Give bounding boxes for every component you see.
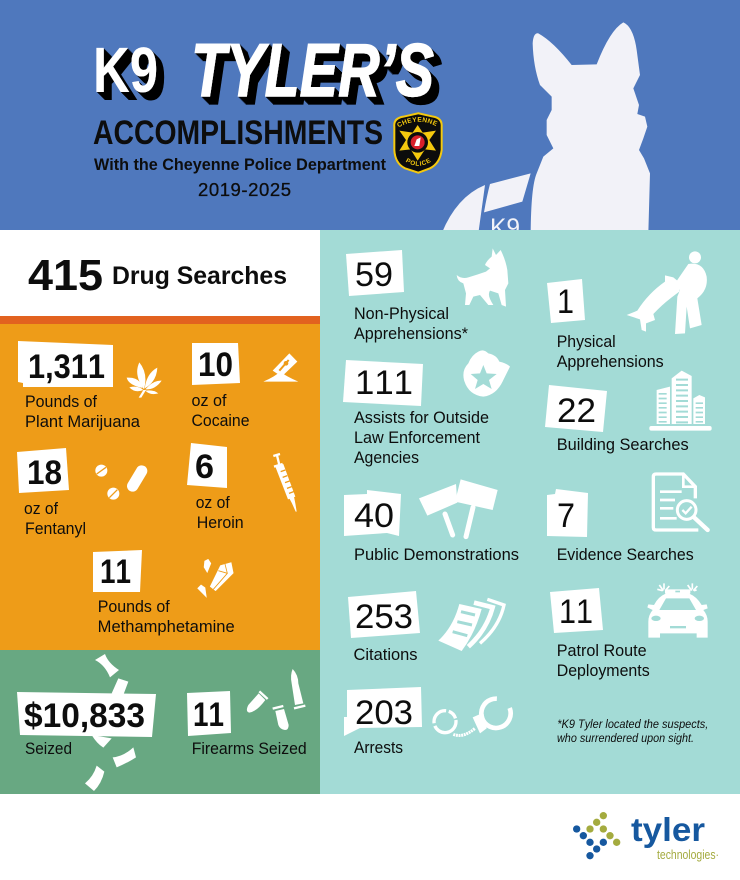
footnote bbox=[557, 719, 708, 745]
label: Firearms Seized bbox=[192, 740, 307, 758]
icon: police badge bbox=[463, 350, 510, 397]
label: Evidence Searches bbox=[557, 546, 694, 564]
label: Methamphetamine bbox=[98, 618, 235, 636]
number: 10 bbox=[198, 346, 233, 384]
number card bbox=[344, 687, 422, 736]
divider band bbox=[0, 316, 320, 324]
logo: Tyler Technologies bbox=[573, 811, 719, 862]
logo tagline: technologies· bbox=[657, 848, 719, 862]
number: 59 bbox=[355, 256, 393, 294]
label: Seized bbox=[25, 740, 72, 758]
police badge: CHEYENNE bbox=[397, 117, 438, 127]
number: 22 bbox=[557, 392, 596, 430]
stat: arrests bbox=[344, 687, 515, 757]
number card bbox=[187, 691, 231, 736]
logo dots bbox=[573, 812, 620, 859]
label: Apprehensions* bbox=[354, 325, 469, 343]
stat: public demonstrations bbox=[344, 479, 519, 564]
label: Arrests bbox=[354, 739, 403, 757]
number card bbox=[18, 341, 113, 387]
stat: methamphetamine bbox=[93, 550, 235, 636]
icon: document and magnifier bbox=[653, 474, 708, 530]
icon: citation papers bbox=[438, 599, 504, 651]
footnote: who surrendered upon sight. bbox=[557, 733, 694, 745]
label bbox=[192, 392, 250, 430]
icon: pills bbox=[95, 465, 142, 500]
label: Plant Marijuana bbox=[25, 413, 141, 431]
header background bbox=[0, 0, 740, 231]
label: Heroin bbox=[197, 514, 244, 532]
label: Apprehensions bbox=[557, 353, 664, 371]
icon: police car bbox=[647, 583, 708, 638]
number card bbox=[93, 550, 142, 592]
icon: flying banknotes bbox=[85, 654, 136, 791]
label bbox=[557, 642, 650, 680]
label: Agencies bbox=[354, 449, 419, 467]
heading accomplishments: ACCOMPLISHMENTS bbox=[93, 114, 383, 152]
label bbox=[557, 333, 664, 371]
drug searches text: Drug Searches bbox=[112, 262, 287, 290]
stat: patrol route deployments bbox=[550, 583, 708, 680]
number card bbox=[346, 250, 404, 296]
label: Pounds of bbox=[98, 598, 170, 616]
stat: evidence searches bbox=[547, 474, 708, 564]
icon: bullets bbox=[247, 669, 305, 730]
date range: 2019-2025 bbox=[198, 179, 291, 200]
icon: dog biting officer bbox=[627, 251, 707, 334]
stat: cash seized bbox=[17, 692, 156, 758]
number: 6 bbox=[195, 448, 214, 486]
police badge bbox=[393, 112, 443, 174]
number: 18 bbox=[27, 454, 62, 492]
icon: razor and powder bbox=[263, 353, 298, 382]
vest K9 text: K9 bbox=[490, 214, 520, 242]
number: $10,833 bbox=[24, 697, 145, 735]
number card bbox=[547, 489, 588, 537]
headline background bbox=[0, 230, 320, 316]
stat: assists bbox=[343, 350, 510, 467]
number: 253 bbox=[355, 598, 413, 636]
icon: sitting dog bbox=[457, 248, 508, 307]
title K9: K9 bbox=[93, 34, 158, 106]
number: 11 bbox=[100, 553, 131, 591]
icon: syringe bbox=[273, 454, 297, 512]
panel: enforcement stats bbox=[343, 248, 712, 757]
subtitle: With the Cheyenne Police Department bbox=[94, 155, 386, 174]
number: 203 bbox=[355, 694, 413, 732]
number card bbox=[17, 448, 69, 493]
label bbox=[24, 500, 86, 538]
icon: protest signs bbox=[419, 479, 498, 537]
label bbox=[98, 598, 235, 636]
label: Assists for Outside bbox=[354, 409, 489, 427]
number: 40 bbox=[354, 497, 394, 535]
stat: firearms seized bbox=[187, 669, 307, 758]
number: 1,311 bbox=[28, 348, 105, 386]
number: 11 bbox=[559, 593, 593, 631]
stat: marijuana bbox=[18, 341, 162, 431]
stat: physical apprehensions bbox=[547, 251, 707, 371]
green background bbox=[0, 650, 320, 794]
icon: cannabis leaf bbox=[127, 362, 162, 398]
panel: cash and firearms bbox=[0, 650, 320, 794]
dog silhouette with vest bbox=[442, 22, 650, 233]
number card bbox=[343, 360, 423, 406]
number: 111 bbox=[355, 364, 413, 402]
label: Non-Physical bbox=[354, 305, 449, 323]
stat: building searches bbox=[545, 371, 712, 454]
header panel bbox=[0, 0, 740, 242]
label: Citations bbox=[354, 646, 418, 664]
label: Law Enforcement bbox=[354, 429, 480, 447]
number: 1 bbox=[557, 283, 574, 321]
label bbox=[25, 393, 141, 431]
stat: cocaine bbox=[192, 343, 298, 430]
logo wordmark: tyler bbox=[631, 811, 705, 848]
label bbox=[354, 409, 489, 467]
label: oz of bbox=[196, 494, 230, 512]
label: Pounds of bbox=[25, 393, 97, 411]
stat: non-physical apprehensions bbox=[346, 248, 508, 343]
number 415: 415 bbox=[28, 251, 103, 300]
number: 7 bbox=[557, 497, 575, 535]
number card bbox=[348, 591, 420, 638]
stat: citations bbox=[348, 591, 504, 664]
label: Cocaine bbox=[192, 412, 250, 430]
label: Public Demonstrations bbox=[354, 546, 519, 564]
stat: fentanyl bbox=[17, 448, 142, 538]
label: Patrol Route bbox=[557, 642, 647, 660]
label bbox=[354, 305, 469, 343]
panel: right stats background bbox=[320, 230, 740, 794]
label: oz of bbox=[192, 392, 227, 410]
icon: handcuffs bbox=[434, 695, 515, 735]
footnote: *K9 Tyler located the suspects, bbox=[557, 719, 708, 731]
number card bbox=[550, 588, 603, 633]
label bbox=[196, 494, 244, 532]
number card bbox=[547, 279, 585, 323]
label: Deployments bbox=[557, 662, 650, 680]
number card bbox=[187, 443, 227, 488]
panel: drug searches headline bbox=[0, 230, 320, 316]
label: Physical bbox=[557, 333, 616, 351]
number card bbox=[344, 490, 401, 536]
label: Fentanyl bbox=[25, 520, 86, 538]
number card bbox=[192, 343, 240, 385]
number card bbox=[545, 385, 607, 432]
label: oz of bbox=[24, 500, 58, 518]
number: 11 bbox=[193, 696, 224, 734]
panel: drugs seized bbox=[0, 324, 320, 650]
label: Building Searches bbox=[557, 436, 689, 454]
police badge: POLICE bbox=[406, 158, 431, 166]
icon: buildings bbox=[649, 371, 712, 431]
number card bbox=[17, 692, 156, 737]
title TYLER'S: TYLER’S bbox=[191, 28, 434, 112]
icon: crystals bbox=[197, 558, 234, 599]
stat: heroin bbox=[187, 443, 297, 532]
orange background bbox=[0, 324, 320, 650]
